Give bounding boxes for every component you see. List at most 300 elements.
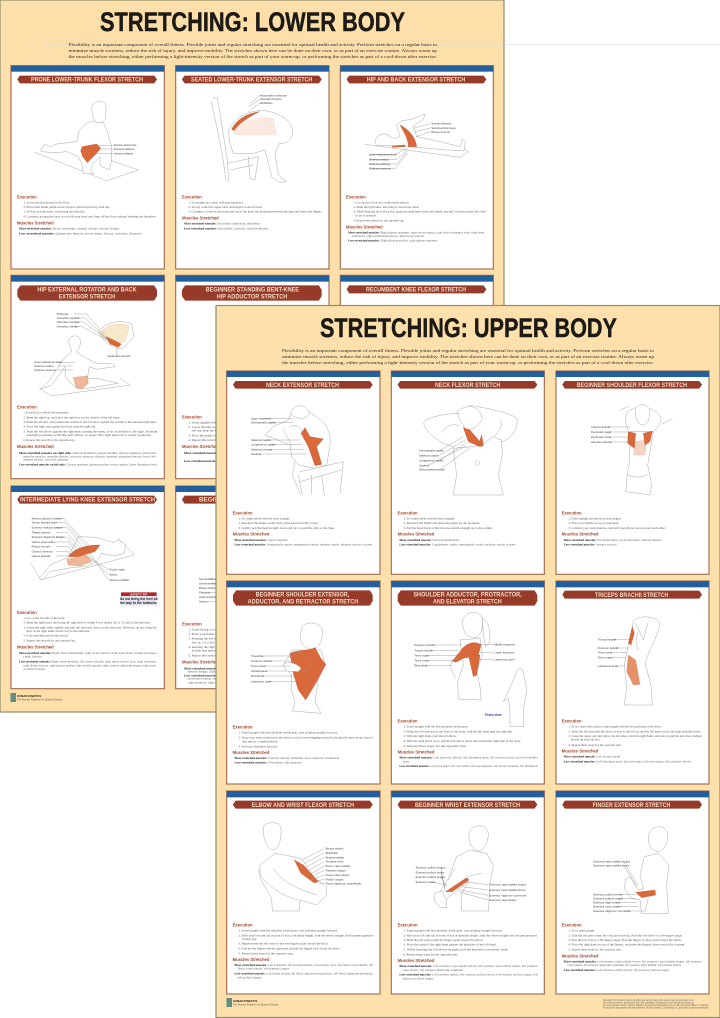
- intro text: upper body: minimize muscle soreness, reduce the risk of injury, and improve mobility. The stretches shown here can be done on their own, or as part of an exercise routine. Always warm up: [282, 354, 655, 360]
- card: beginner standing bent-knee hip adductor stretch: Less-stretched muscles: Right gluteus medius, right gluteus minimus: [184, 459, 278, 464]
- card: neck flexor stretch: Execution: [398, 510, 418, 515]
- illustration: elbow and wrist flexor stretch: Palmaris longus: [326, 868, 346, 872]
- callout: safety tip: [120, 592, 158, 606]
- card: prone lower-trunk flexor stretch: [11, 66, 164, 269]
- illustration: lying knee-to-chest stretch: Gluteus minimus: [369, 162, 391, 166]
- illustration: neck extensor stretch from behind: Splenius capitis: [251, 438, 271, 442]
- card: beginner lying stretch, partly covered: in both legs moving the hips toward the wall slowly.: [192, 649, 262, 653]
- illustration: cobra stretch: External oblique: [114, 147, 135, 151]
- illustration: seated forward bend on chair: Spinalis thoracis: [261, 97, 282, 101]
- illustration: shoulder cross-body stretch with front view: Posterior deltoid: [414, 643, 435, 647]
- card: elbow and wrist flexor stretch: 3. Hyperextend the left wrist so that the fingers point toward the floor.: [238, 942, 329, 946]
- card: finger extensor stretch: 1. Sit or stand upright.: [568, 929, 595, 933]
- footer: publisher logo upper body: [226, 998, 279, 1007]
- card: elbow and wrist flexor stretch: 2. Hold your left arm out in front of you at shoulder height, with the elbow straight and forearm supinated: [238, 933, 374, 938]
- intro text: lower body: minimize muscle soreness, reduce the risk of injury, and improve mobility. The stretches shown here can be done on their own, or as part of an exercise routine. Always warm up: [68, 48, 438, 54]
- card: elbow and wrist flexor stretch: flexor carpi ulnaris, left palmaris longus: [238, 967, 290, 972]
- card: beginner standing bent-knee hip adductor stretch: Muscles Stretched: [182, 444, 219, 449]
- card: hip external rotator and back extensor stretch: 3. Bend the left arm, and position the outside of the left elbow against the outside of the upraised right knee.: [23, 420, 157, 425]
- illustration: overhead triceps stretch: Posterior deltoid: [598, 646, 619, 650]
- card: intermediate lying knee extensor stretch: right iliacus: [23, 655, 42, 659]
- card: finger extensor stretch: 5. Repeat these steps for the opposite arm.: [568, 947, 622, 951]
- illustration: standing shoulder flexor stretch: Serratus anterior: [591, 440, 612, 444]
- illustration: side-lying quadriceps stretch: [31, 516, 134, 582]
- illustration: seated spinal twist: [34, 312, 134, 396]
- card: beginner lying stretch, partly covered: 1. Stand facing a wall with feet apart and hands at chest level.: [188, 627, 271, 631]
- card: neck flexor stretch: Most-stretched muscle: Sternocleidomastoid: [399, 538, 459, 542]
- card: beginner lying stretch, partly covered: Semitendinosus: [199, 577, 220, 581]
- card: intermediate lying knee extensor stretch: 5. Repeat this stretch for the opposite leg.: [23, 638, 76, 642]
- illustration: side-lying quadriceps stretch: Iliacus: [109, 572, 118, 576]
- illustration: elbow and wrist flexor stretch: [258, 823, 362, 911]
- poster: stretching lower body: [0, 0, 720, 712]
- illustration: finger extensor stretch: Extensor pollicis brevis: [593, 892, 623, 896]
- illustration: finger extensor stretch: [593, 827, 669, 913]
- illustration: self hug shoulder stretch from behind: Posterior deltoid: [251, 659, 272, 663]
- card: beginner standing bent-knee hip adductor stretch: [176, 275, 329, 479]
- card: hip and back extensor stretch: 3. While keeping the left leg flat, grasp the right knee with both hands, and pull it down toward the chest: [353, 210, 486, 215]
- illustration: elbow and wrist flexor stretch: Flexor carpi radialis: [326, 864, 351, 868]
- illustration: side-lying quadriceps stretch: Anterior gluteus medius: [32, 516, 62, 520]
- illustration: wrist extensor stretch: Extensor pollicis longus: [416, 875, 446, 879]
- card: neck extensor stretch: Execution: [233, 510, 253, 515]
- card: elbow and wrist flexor stretch: ELBOW AND WRIST FLEXOR STRETCH: [252, 802, 354, 809]
- illustration: overhead triceps stretch: Teres minor: [598, 651, 612, 655]
- card: beginner shoulder flexor stretch: 1. Stand upright and interlock your fingers.: [568, 516, 622, 520]
- illustration: seated forward bend on chair: [211, 93, 293, 183]
- card: finger extensor stretch: Execution: [562, 922, 582, 927]
- illustration: shoulder cross-body stretch with front view: Middle trapezius: [494, 642, 516, 646]
- illustration: side-lying quadriceps stretch: Vastus medialis: [109, 578, 130, 582]
- illustration: side-lying quadriceps stretch: Tensor fasciae latae: [32, 521, 57, 525]
- card: seated lower-trunk extensor stretch: SEATED LOWER-TRUNK EXTENSOR STRETCH: [191, 77, 313, 84]
- illustration: wrist extensor stretch: Extensor pollicis brevis: [416, 870, 445, 874]
- card: beginner wrist extensor stretch: carpi ulnaris, left extensor digitorum communis: [403, 968, 464, 973]
- illustration: lying knee-to-chest stretch: Gluteus medius: [369, 157, 389, 161]
- illustration: side-lying quadriceps stretch: Vastus intermedius: [32, 540, 56, 544]
- title: stretching lower body: STRETCHING: LOWER BODY: [100, 7, 405, 37]
- illustration: lying knee-to-chest stretch: Semimembranosus: [431, 126, 456, 130]
- card: neck extensor stretch: 3. Lightly pull the head straight down and try to touch the chin to the chest.: [238, 526, 335, 530]
- card: beginner standing bent-knee hip adductor stretch: left leg: keep the left knee extended and the foot on the floor.: [192, 429, 273, 433]
- card: beginner wrist extensor stretch: 2. Hold your left arm out in front of you at shoulder height, with the elbow straight and forearm pronated.: [403, 933, 538, 938]
- illustration: self hug shoulder stretch from behind: Latissimus dorsi: [251, 679, 272, 683]
- illustration: shoulder cross-body stretch with front view: Teres major: [414, 653, 429, 657]
- card: beginner lying stretch, partly covered: Soleus: [199, 600, 208, 604]
- card: triceps brachii stretch: 4. Repeat these steps for the opposite arm.: [568, 743, 622, 747]
- card: beginner shoulder extensor, adductor, and retractor stretch: [227, 581, 380, 784]
- illustration: elbow and wrist flexor stretch: Flexor digitorum superficialis: [326, 882, 362, 886]
- illustration: seated spinal twist: Obturator internus: [57, 320, 80, 324]
- footer: publisher logo lower body: HUMAN KINETICS: [17, 694, 41, 698]
- illustration: side-lying quadriceps stretch: Extensor digitorum longus: [32, 535, 65, 539]
- card: beginner standing bent-knee hip adductor stretch: Most-stretched muscles: Left adductor longus, left adductor brevis, left: [184, 451, 281, 456]
- card: shoulder adductor, protractor, and elevator stretch: SHOULDER ADDUCTOR, PROTRACTOR,: [413, 592, 522, 599]
- card: hip external rotator and back extensor stretch: [11, 275, 164, 479]
- card: beginner shoulder extensor, adductor, and retractor stretch: Execution: [233, 725, 253, 730]
- card: hip and back extensor stretch: Execution: [346, 194, 366, 199]
- card: beginner lying stretch, partly covered: BEGINNER SEATED STRETCH: [199, 497, 291, 504]
- card: hip and back extensor stretch: HIP AND BACK EXTENSOR STRETCH: [367, 77, 466, 84]
- illustration: standing shoulder flexor stretch: Pectoralis minor: [591, 435, 611, 439]
- footer: copyright notice: form without written permission from the publisher. Illustrations from Stretching Anatomy.: [603, 1002, 694, 1004]
- illustration: neck flexor stretch, hands on forehead: Longissimus capitis: [419, 458, 444, 462]
- illustration: seated spinal twist: Gluteus medius: [34, 364, 54, 368]
- illustration: lying knee-to-chest stretch: Biceps femoris: [431, 130, 450, 134]
- card: beginner shoulder flexor stretch: Less-stretched muscles: Serratus anterior: [564, 543, 617, 547]
- illustration: shoulder cross-body stretch with front view: [414, 612, 527, 727]
- card: shoulder adductor, protractor, and elevator stretch: 5. Repeat these steps for the opposite arm.: [403, 744, 467, 748]
- card: shoulder adductor, protractor, and elevator stretch: 2. Bring the left arm across the front of the body, with the left hand near the right hip.: [403, 729, 513, 734]
- card: hip external rotator and back extensor stretch: HIP EXTERNAL ROTATOR AND BACK: [37, 287, 137, 294]
- illustration: shoulder cross-body stretch with front view: Rhomboid: [414, 664, 428, 668]
- illustration: self hug shoulder stretch from behind: [251, 623, 326, 713]
- card: intermediate lying knee extensor stretch: Execution: [17, 610, 37, 615]
- card: elbow and wrist flexor stretch: [227, 791, 380, 994]
- card: triceps brachii stretch: TRICEPS BRACHII STRETCH: [595, 592, 669, 599]
- illustration: finger extensor stretch: Extensor carpi ulnaris: [593, 904, 621, 908]
- card: beginner shoulder extensor, adductor, and retractor stretch: 2. Wrap your arms around your shoulders as if you were hugging yourself, placing the arms on top (one to: [238, 736, 373, 741]
- card: intermediate lying knee extensor stretch: Less-stretched muscles: Right vastus medialis, left vastus lateralis, right tensor fasciae latae, right pectineus,: [19, 660, 157, 665]
- intro text: upper body: Flexibility is an important component of overall fitness. Flexible joints and regular stretching are essential for optimal health and activity. Perform stretches on a regular basis to: [282, 348, 655, 353]
- illustration: self hug shoulder stretch from behind: Infraspinatus: [251, 669, 268, 673]
- card: hip and back extensor stretch: 2. Bend the right knee, and bring it toward the chest.: [353, 205, 419, 210]
- illustration: wrist extensor stretch: Abductor pollicis longus: [416, 866, 446, 870]
- card: beginner lying stretch, partly covered: Less-stretched muscles: Right soleus, right plantaris: [184, 673, 256, 678]
- card: shoulder adductor, protractor, and elevator stretch: trapezius: [403, 759, 410, 763]
- card: beginner wrist extensor stretch: 4. Place the palm of the right hand against the knuckles of the left hand.: [403, 943, 497, 947]
- card: finger extensor stretch: Most-stretched muscles: Left extensor carpi radialis brevis, left extensor carpi radialis longus, left extensor: [564, 959, 703, 964]
- illustration: neck flexor stretch, hands on forehead: [419, 405, 517, 495]
- card: hip external rotator and back extensor stretch: gemellus superior, gemellus inferior, obturator externus, obturator internus, quadratus femoris, lower latis-: [23, 454, 157, 459]
- card: beginner shoulder flexor stretch: Execution: [562, 510, 582, 515]
- card: hip and back extensor stretch: Less-stretched muscles: Right gluteus medius, right gluteus minimus: [348, 239, 438, 244]
- callout: safety tip: SAFETY TIP: [130, 592, 147, 596]
- footer: publisher logo upper body: HUMAN KINETICS: [233, 999, 257, 1003]
- footer: copyright notice: [603, 999, 709, 1010]
- illustration: overhead triceps stretch: [598, 617, 660, 705]
- card: intermediate lying knee extensor stretch: sor hallucis longus: [23, 667, 46, 671]
- card: intermediate lying knee extensor stretch: Most-stretched muscles: Right vastus intermedius, right rectus femoris, right psoas major, middle and upper: [19, 651, 158, 656]
- card: seated lower-trunk extensor stretch: Muscles Stretched: [182, 215, 219, 220]
- card: triceps brachii stretch: Most-stretched muscle: Left triceps brachii: [564, 755, 620, 759]
- card: beginner wrist extensor stretch: Execution: [398, 922, 418, 927]
- card: shoulder adductor, protractor, and elevator stretch: [391, 581, 544, 784]
- illustration: elbow and wrist flexor stretch: Brachialis: [326, 851, 339, 855]
- card: beginner lying stretch, partly covered: Plantaris: [199, 590, 211, 594]
- illustration: finger extensor stretch: Extensor digitorum communis: [593, 909, 631, 913]
- card: beginner lying stretch, partly covered: right plantaris, right gastrocnemius and posterior: [188, 680, 253, 685]
- card: beginner standing bent-knee hip adductor stretch: Execution: [182, 414, 202, 419]
- card: neck extensor stretch: 1. Sit comfortably with the back straight.: [238, 516, 290, 520]
- card: neck extensor stretch: [227, 371, 380, 574]
- card: neck extensor stretch: Less-stretched muscles: Semispinalis capitis, semispinalis capitis, splenius capitis, splenius cervicis, scalene: [234, 543, 373, 548]
- intro text: upper body: [282, 348, 655, 366]
- card: prone lower-trunk flexor stretch: Execution: [17, 194, 37, 199]
- card: hip external rotator and back extensor stretch: Most-stretched muscles on right side: Gluteus maximus, gluteus medius, gluteus minimus, piriformis,: [19, 451, 157, 456]
- illustration: shoulder cross-body stretch with front view: Latissimus dorsi: [494, 658, 515, 662]
- illustration: shoulder cross-body stretch with front view: Lower trapezius: [494, 650, 515, 654]
- illustration: elbow and wrist flexor stretch: Flexor carpi ulnaris: [326, 873, 350, 877]
- illustration: neck flexor stretch, hands on forehead: Semispinalis capitis: [419, 449, 444, 453]
- card: beginner lying stretch, partly covered: foot in 1 to 2 feet away from the wall and keep it flat.: [192, 640, 263, 644]
- illustration: wrist extensor stretch: Extensor carpi ulnaris: [489, 898, 517, 902]
- illustration: cobra stretch: Rectus abdominis: [114, 143, 137, 147]
- card: prone lower-trunk flexor stretch: Muscles Stretched: [17, 220, 54, 225]
- card: elbow and wrist flexor stretch: (turned up).: [242, 937, 257, 941]
- illustration: seated spinal twist: Quadratus femoris: [107, 354, 131, 358]
- intro text: lower body: Flexibility is an important component of overall fitness. Flexible joints and regular stretching are essential for optimal health and activity. Perform stretches on a regular basis to: [68, 42, 438, 47]
- card: beginner shoulder flexor stretch: BEGINNER SHOULDER FLEXOR STRETCH: [577, 382, 687, 389]
- card: elbow and wrist flexor stretch: Most-stretched muscles: Left brachialis, left brachioradialis, left pronator teres, left flexor carpi radialis, left: [234, 963, 373, 968]
- illustration: seated spinal twist: Lower latissimus dorsi: [34, 360, 62, 364]
- card: beginner wrist extensor stretch: 3. Bend the left wrist so that the fingers point toward the elbow.: [403, 938, 483, 942]
- card: beginner standing bent-knee hip adductor stretch: 3. Place the hands on the right thigh for balance and support.: [188, 433, 269, 437]
- illustration: neck flexor stretch, hands on forehead: Sternocleidomastoid: [419, 468, 445, 472]
- card: beginner wrist extensor stretch: BEGINNER WRIST EXTENSOR STRETCH: [415, 802, 520, 809]
- illustration: self hug shoulder stretch from behind: Teres minor: [251, 664, 266, 668]
- illustration: elbow and wrist flexor stretch: Pollicis longus: [326, 877, 344, 881]
- card: beginner wrist extensor stretch: 1. Stand upright with feet shoulder width apart, toes pointing straight forward.: [403, 929, 502, 934]
- illustration: finger extensor stretch: Extensor carpi radialis longus: [593, 860, 631, 864]
- card: elbow and wrist flexor stretch: 1. Stand upright with feet shoulder width apart, toes pointing straight forward.: [238, 929, 338, 934]
- card: beginner shoulder extensor, adductor, and retractor stretch: ADDUCTOR, AND RETRACTOR STRETCH: [248, 599, 359, 606]
- card: beginner lying stretch, partly covered: 5. Repeat this stretch for the opposite leg.: [188, 653, 244, 657]
- card: beginner lying stretch, partly covered: quadratus plantae, right flexor digitorum longus muscle: [188, 677, 262, 682]
- card: beginner lying stretch, partly covered: 3. Keeping the left foot flat on the floor, step forward.: [188, 637, 260, 642]
- illustration: shoulder cross-body stretch with front view: Triceps brachii: [414, 648, 433, 652]
- card: finger extensor stretch: 2. Turn the left arm so that the left palm faces up. Flex the left elbow to a 90-degree angle.: [568, 933, 683, 937]
- card: beginner shoulder flexor stretch: Most-stretched muscles: Pectoralis major, pectoralis minor, anterior deltoid: [564, 538, 661, 543]
- card: hip and back extensor stretch: as far as possible.: [355, 214, 377, 218]
- card: prone lower-trunk flexor stretch: Most-stretched muscles: Rectus abdominis, external oblique, internal oblique: [19, 226, 120, 231]
- card: hip and back extensor stretch: 1. Lie on your back on a comfortable surface.: [353, 200, 409, 204]
- illustration: wrist extensor stretch: Extensor indicis: [416, 880, 436, 884]
- card: neck flexor stretch: 1. Sit comfortably with the back straight.: [403, 516, 455, 520]
- card: hip external rotator and back extensor stretch: Less-stretched muscles on left side: Gluteus maximus, gluteus medius, erector spinae, lower latissimus dorsi: [19, 462, 157, 467]
- card: beginner wrist extensor stretch: Less-stretched muscles: Left extensor indicis, left extensor pollicis brevis, left extensor pollicis longus, left: [399, 973, 538, 978]
- illustration: side-lying quadriceps stretch: Psoas major: [109, 567, 125, 571]
- illustration: elbow and wrist flexor stretch: Biceps brachii: [326, 847, 344, 851]
- card: hip external rotator and back extensor stretch: Execution: [17, 404, 37, 409]
- card: beginner lying stretch, partly covered: Execution: [182, 621, 202, 626]
- illustration: elbow and wrist flexor stretch: Pronator teres: [326, 860, 344, 864]
- card: beginner standing bent-knee hip adductor stretch: 2. Lower the hips as far as comfortable, bending the right knee.: [188, 425, 273, 430]
- card: beginner wrist extensor stretch: 5. While keeping the left elbow straight, pull the knuckles toward the body.: [403, 947, 508, 952]
- card: hip external rotator and back extensor stretch: enough pressure with the left elbow to keep the right knee in a stable position.: [27, 433, 152, 437]
- card: triceps brachii stretch: 1. Sit in a chair with a back or stand upright with the left arm flexed at the elbow.: [568, 725, 662, 729]
- illustration: elbow and wrist flexor stretch: Brachioradialis: [326, 855, 345, 859]
- card: intermediate lying knee extensor stretch: heel of the right ankle all the way to the buttocks.: [27, 629, 90, 633]
- card: beginner shoulder flexor stretch: [556, 371, 709, 574]
- illustration: neck flexor stretch, hands on forehead: Splenius capitis: [419, 454, 439, 458]
- footer: copyright notice: Produced in association with the publisher. Human Kinetics, Champaign, IL, and other locations worldwide.: [603, 1006, 709, 1010]
- illustration: seated spinal twist: Gemellus inferior: [57, 324, 78, 328]
- card: seated lower-trunk extensor stretch: Most-stretched muscles: Iliocostalis lumborum, multifidus: [184, 222, 261, 227]
- card: intermediate lying knee extensor stretch: 3. Grasp the right ankle tightly, and pull the leg back close to your buttocks. However, do not bring the: [23, 625, 157, 630]
- illustration: shoulder cross-body stretch with front view: Teres minor: [414, 658, 429, 662]
- card: triceps brachii stretch: 2. Raise the left arm until the elbow is next to the left ear and the left hand is near the right shoulder blade.: [568, 729, 701, 733]
- card: prone lower-trunk flexor stretch: 1. Lie prone (facedown) on the floor.: [23, 200, 70, 204]
- card: beginner lying stretch, partly covered: Muscles Stretched: [182, 660, 219, 665]
- card: beginner shoulder flexor stretch: Muscles Stretched: [562, 532, 599, 537]
- card: elbow and wrist flexor stretch: 4. Grab the left fingers with the right hand, and pull the fingers back toward the elbow.: [238, 947, 340, 952]
- card: neck flexor stretch: 3. Pull the head back so that the nose points straight up to the ceiling.: [403, 526, 493, 530]
- card: finger extensor stretch: Muscles Stretched: [562, 953, 599, 958]
- card: shoulder adductor, protractor, and elevator stretch: Execution: [398, 719, 418, 724]
- card: beginner shoulder extensor, adductor, and retractor stretch: 1. Stand upright with feet shoulder width apart, toes pointing straight forward.: [238, 731, 337, 736]
- card: shoulder adductor, protractor, and elevator stretch: AND ELEVATOR STRETCH: [433, 599, 502, 606]
- card: beginner lying stretch, partly covered: femoris longus, right biceps femoris brevis and others: [188, 670, 260, 675]
- illustration: seated forward bend on chair: Multifidus: [261, 101, 273, 105]
- illustration: side-lying quadriceps stretch: Vastus lateralis: [32, 554, 51, 558]
- illustration: wrist extensor stretch: Extensor carpi radialis brevis: [489, 888, 526, 892]
- card: beginner wrist extensor stretch: abductor pollicis longus: [403, 977, 434, 981]
- card: neck extensor stretch: 2. Interlock the hands on the back of the head near the crown.: [238, 521, 318, 525]
- card: beginner shoulder flexor stretch: 2. Place your hands on top of your head.: [568, 521, 619, 525]
- card: beginner standing bent-knee hip adductor stretch: 4. Repeat this stretch for the opposite leg.: [188, 438, 244, 442]
- card: elbow and wrist flexor stretch: Muscles Stretched: [233, 957, 270, 962]
- intro text: upper body: the muscles before stretching, either performing a light-intensity version of the stretch as part of your warm-up, or performing the stretches as part of a cool-down after exercise.: [282, 360, 654, 366]
- illustration: cobra stretch: Internal oblique: [114, 152, 134, 156]
- illustration: self hug shoulder stretch from behind: Rhomboid: [251, 674, 264, 678]
- card: hip external rotator and back extensor stretch: 4. Place the right arm against the floor near the right hip.: [23, 424, 96, 428]
- card: triceps brachii stretch: Execution: [562, 719, 582, 724]
- card: neck flexor stretch: 2. Interlock the hands and place the palms on the forehead.: [403, 521, 480, 525]
- card: beginner shoulder extensor, adductor, and retractor stretch: Muscles Stretched: [233, 750, 270, 755]
- card: neck flexor stretch: NECK FLEXOR STRETCH: [435, 382, 501, 389]
- card: beginner standing bent-knee hip adductor stretch: HIP ADDUCTOR STRETCH: [217, 294, 288, 301]
- card: seated lower-trunk extensor stretch: 2. Slowly round the upper back and begin to lean forward.: [188, 205, 262, 209]
- card: triceps brachii stretch: 3. Grasp the upper arm just below the left elbow with the right hand, and pull or push the left elbow behind: [568, 734, 702, 739]
- card: beginner wrist extensor stretch: Most-stretched muscles: Left extensor carpi radialis brevis, left extensor carpi radialis longus, left extensor: [399, 964, 539, 969]
- illustration: overhead triceps stretch: Teres major: [598, 655, 612, 659]
- illustration: neck flexor stretch, hands on forehead: Scalene: [419, 463, 430, 467]
- card: hip external rotator and back extensor stretch: simus dorsi, erector spinae: [23, 457, 69, 462]
- card: finger extensor stretch: [556, 791, 709, 994]
- illustration: side-lying quadriceps stretch: Rectus femoris: [32, 545, 51, 549]
- poster: stretching upper body: [216, 306, 720, 1018]
- card: seated lower-trunk extensor stretch: 1. Sit upright on a chair, with legs separated.: [188, 200, 243, 205]
- illustration: finger extensor stretch: Extensor carpi radialis brevis: [593, 863, 630, 867]
- card: hip external rotator and back extensor stretch: 2. Bend the right leg, and place the right foot on the outside of the left knee.: [23, 415, 120, 420]
- illustration: lying knee-to-chest stretch: Semitendinosus: [431, 122, 452, 126]
- card: triceps brachii stretch: the head and toward the floor.: [571, 738, 600, 742]
- card: prone lower-trunk flexor stretch: Less-stretched muscles: Quadriceps femoris, psoas minor, iliacus, sartorius, iliopsoas: [19, 231, 142, 236]
- card: elbow and wrist flexor stretch: 5. Repeat these steps for the opposite arm.: [238, 951, 293, 955]
- card: elbow and wrist flexor stretch: left pollicis longus: [238, 975, 262, 979]
- illustration: wrist extensor stretch: Extensor digitorum communis: [489, 893, 527, 897]
- intro text: lower body: [68, 42, 438, 60]
- card: intermediate lying knee extensor stretch: 1. Lie on the left side of the body.: [23, 616, 65, 620]
- card: finger extensor stretch: FINGER EXTENSOR STRETCH: [593, 802, 671, 809]
- card: beginner lying stretch, partly covered: Gastrocnemius: [199, 595, 219, 599]
- card: finger extensor stretch: 3. Flex the left wrist to a 90-degree angle. Flex the fingers so they point toward the elbow.: [568, 938, 682, 942]
- intro text: lower body: the muscles before stretching, either performing a light-intensity version of the stretch as part of your warm-up, or performing the stretches as part of a cool-down after exercise.: [68, 54, 437, 60]
- footer: publisher logo lower body: [10, 693, 63, 702]
- card: beginner shoulder extensor, adductor, and retractor stretch: 3. Pull your shoulders forward.: [238, 744, 278, 748]
- illustration: side-lying quadriceps stretch: Extensor hallucis longus: [32, 525, 63, 529]
- illustration: neck extensor stretch from behind: Semispinalis capitis: [251, 420, 276, 424]
- card: shoulder adductor, protractor, and elevator stretch: 1. Stand upright with the feet shoulder width apart.: [403, 725, 468, 729]
- card: recumbent knee flexor stretch: [340, 275, 493, 479]
- illustration: finger extensor stretch: Extensor digiti minimi: [593, 900, 620, 904]
- card: intermediate lying knee extensor stretch: Muscles Stretched: [17, 644, 54, 649]
- illustration: seated forward bend on chair: Iliocostalis lumborum: [261, 93, 288, 97]
- card: neck flexor stretch: Muscles Stretched: [398, 532, 435, 537]
- card: beginner shoulder extensor, adductor, and retractor stretch: Less-stretched muscles: Teres minor, infraspinatus: [234, 761, 302, 766]
- illustration: finger extensor stretch: Extensor pollicis longus: [593, 896, 623, 900]
- illustration: neck extensor stretch from behind: Splenius cervicis: [251, 447, 273, 451]
- card: elbow and wrist flexor stretch: Execution: [233, 922, 253, 927]
- footer: publisher logo upper body: The Premier Publisher for Sports & Fitness: [233, 1004, 279, 1007]
- callout: safety tip: the way to the buttocks.: [120, 601, 158, 605]
- footer: publisher logo lower body: The Premier Publisher for Sports & Fitness: [17, 699, 63, 702]
- illustration: overhead triceps stretch: Triceps brachii: [598, 637, 616, 641]
- card: prone lower-trunk flexor stretch: 4. Continue arching the back as you lift your head and chest off the floor without bending the shoulders.: [23, 215, 157, 219]
- card: beginner wrist extensor stretch: Muscles Stretched: [398, 958, 435, 963]
- card: hip and back extensor stretch: Most-stretched muscles: Right gluteus maximus, right erector spinae, right lower latissimus dorsi, right semi-: [348, 230, 485, 235]
- card: hip and back extensor stretch: 4. Repeat this stretch for the opposite leg.: [353, 218, 404, 222]
- title: stretching upper body: STRETCHING: UPPER BODY: [320, 313, 617, 343]
- card: beginner lying stretch, partly covered: 2. Press your hands on the wall and lean forward slightly.: [188, 632, 265, 636]
- card: beginner shoulder extensor, adductor, and retractor stretch: Most-stretched muscles: Posterior deltoid, latissimus dorsi, trapezius, rhomboids: [234, 756, 340, 761]
- illustration: overhead triceps stretch: Latissimus dorsi: [598, 664, 618, 668]
- card: seated lower-trunk extensor stretch: [176, 66, 329, 269]
- card: neck extensor stretch: NECK EXTENSOR STRETCH: [266, 382, 339, 389]
- illustration: side-lying quadriceps stretch: Tibialis anterior: [32, 530, 51, 534]
- card: neck extensor stretch: Most-stretched muscles: Upper trapezius: [234, 538, 288, 542]
- card: elbow and wrist flexor stretch: Less-stretched muscles: Left biceps brachii, left flexor digitorum superficialis, left flexor digitorum profundus,: [234, 972, 373, 977]
- card: prone lower-trunk flexor stretch: 2. Place both hands palms down, fingers point forward by each hip.: [23, 205, 110, 210]
- card: triceps brachii stretch: [556, 581, 709, 784]
- card: beginner shoulder extensor, adductor, and retractor stretch: BEGINNER SHOULDER EXTENSOR,: [256, 592, 350, 599]
- illustration: lying knee-to-chest stretch: Lower latissimus dorsi: [369, 153, 397, 157]
- illustration: neck extensor stretch from behind: [251, 406, 343, 495]
- card: beginner lying stretch, partly covered: [176, 486, 329, 689]
- card: beginner shoulder extensor, adductor, and retractor stretch: the most comfortable).: [242, 739, 279, 743]
- card: beginner wrist extensor stretch: [391, 791, 544, 994]
- illustration: lying knee-to-chest stretch: Gluteus maximus: [369, 167, 391, 171]
- card: seated lower-trunk extensor stretch: 3. Continue to bend at the waist and lower the head and abdomen between the legs and below the thighs.: [188, 210, 322, 214]
- card: hip and back extensor stretch: tendinosus, right semimembranosus, right biceps femoris: [352, 234, 425, 239]
- card: prone lower-trunk flexor stretch: PRONE LOWER-TRUNK FLEXOR STRETCH: [31, 77, 143, 84]
- illustration: self hug shoulder stretch from behind: Trapezius: [251, 654, 264, 658]
- card: intermediate lying knee extensor stretch: right tibialis anterior, right gluteus medius, right tibialis anterior, right extensor digitorum longus, right exten-: [23, 663, 157, 668]
- card: neck extensor stretch: Muscles Stretched: [233, 532, 270, 537]
- card: prone lower-trunk flexor stretch: 3. Slowly arch the back, contracting the buttocks.: [23, 210, 85, 215]
- illustration: wrist extensor stretch: [416, 826, 527, 911]
- card: hip external rotator and back extensor stretch: 1. Sit on the floor with the left leg extended.: [23, 411, 69, 415]
- card: hip external rotator and back extensor stretch: 5. Push the left elbow against the right knee, turning the trunk, as far as possible to the right. Maintain: [23, 429, 158, 434]
- card: shoulder adductor, protractor, and elevator stretch: Most-stretched muscles: Left posterior deltoid, left latissimus dorsi, left triceps brachii, left lower middle: [399, 756, 538, 761]
- illustration: neck extensor stretch from behind: Scalene: [251, 452, 262, 456]
- illustration: seated spinal twist: Gemellus superior: [57, 316, 80, 320]
- illustration: standing shoulder flexor stretch: Pectoralis major: [591, 430, 611, 434]
- card: triceps brachii stretch: Less-stretched muscles: Left latissimus dorsi, left teres major, left teres minor, left posterior deltoid: [564, 759, 691, 764]
- card: beginner lying stretch, partly covered: Biceps femoris: [199, 586, 218, 590]
- card: neck flexor stretch: Less-stretched muscles: Longissimus capitis, semispinalis capitis, splenius capitis, scalene: [399, 543, 516, 548]
- illustration: cobra stretch: [35, 101, 138, 181]
- card: beginner standing bent-knee hip adductor stretch: BEGINNER STANDING BENT-KNEE: [206, 287, 299, 294]
- card: shoulder adductor, protractor, and elevator stretch: 3. With the right hand, grab the left elbow.: [403, 734, 457, 739]
- illustration: side-lying quadriceps stretch: Gluteus minimus: [32, 550, 53, 554]
- card: seated lower-trunk extensor stretch: Execution: [182, 194, 202, 199]
- callout: safety tip: Do not bring the heel all: [120, 597, 158, 601]
- illustration: wrist extensor stretch: Extensor carpi radialis longus: [489, 883, 527, 887]
- card: shoulder adductor, protractor, and elevator stretch: Less-stretched muscles: Left teres major, left teres minor, left supraspinatus, left levator scapulae, left rhomboids: [399, 764, 538, 769]
- card: seated lower-trunk extensor stretch: Less-stretched muscles: Iliocostalis, rotatores, spinalis thoracis: [184, 226, 269, 231]
